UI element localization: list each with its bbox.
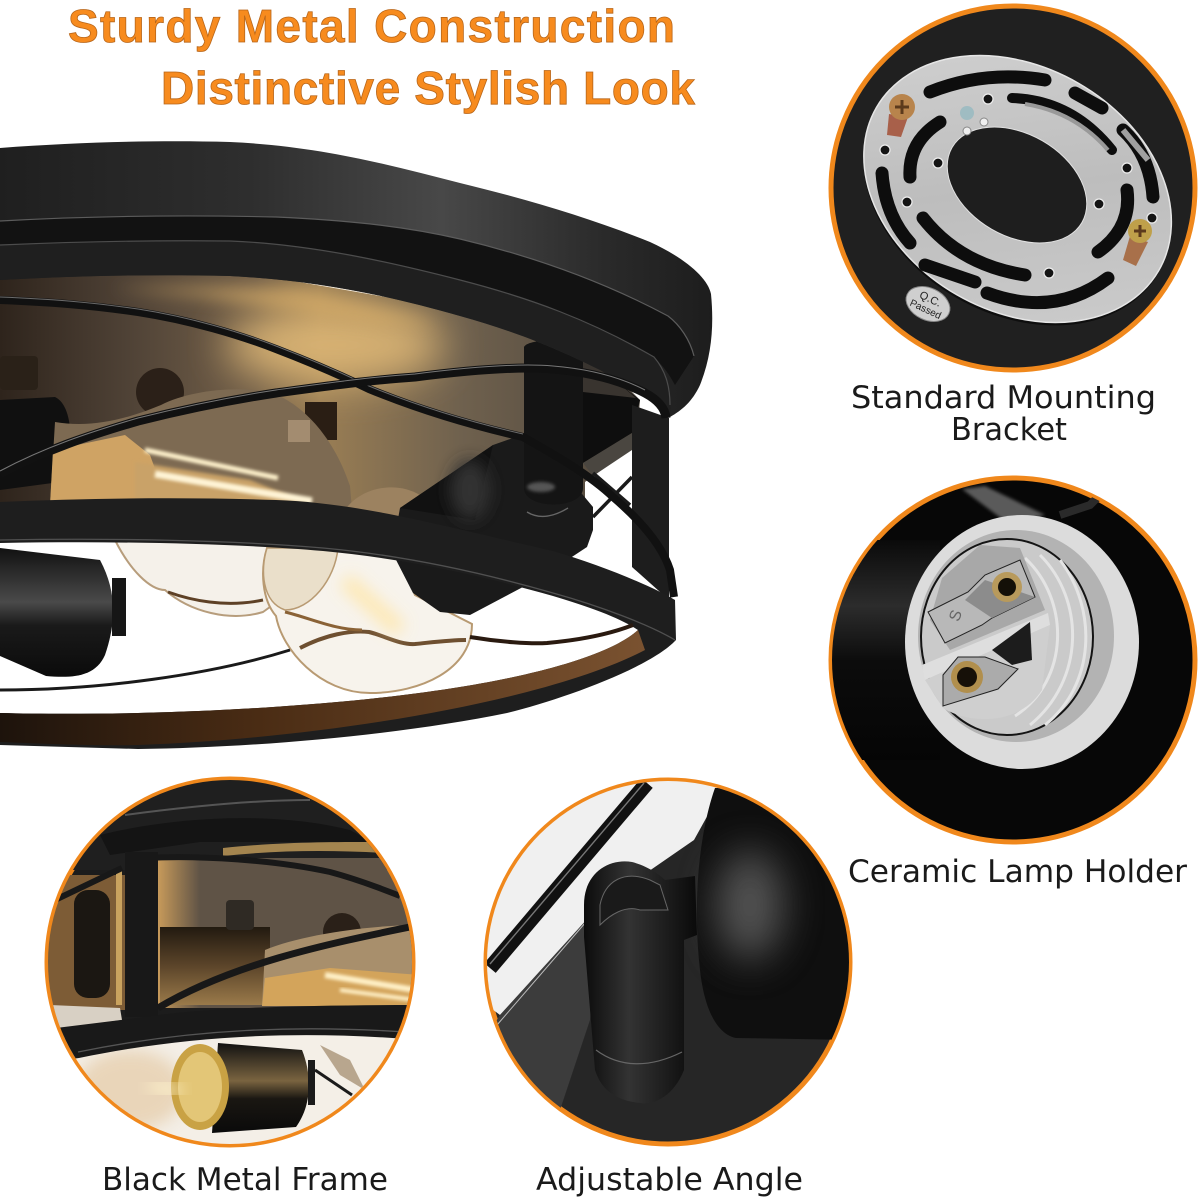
small socket with gold disc [212,1043,309,1133]
grey slope [496,922,590,1108]
large bulb, upper part [50,389,352,510]
right socket [392,432,593,615]
front bulb [263,548,472,693]
left part of interior [45,875,125,1010]
title: Sturdy Metal Construction [68,0,675,52]
cord [490,783,647,968]
holes [880,94,1157,278]
dark recess [992,622,1032,665]
screw right [1123,219,1152,266]
cross wires [593,473,632,517]
drum groove [0,216,694,385]
white ceramic rim [905,515,1139,769]
wires [145,857,400,896]
sticker [906,286,950,322]
label: standard mounting bracket: Standard Mounting [851,380,1156,416]
vertical post [125,852,158,1017]
lower bulb behind ring [115,540,335,616]
small bulb behind right socket [345,487,420,520]
black body sheen [830,540,940,760]
label: standard mounting bracket: Bracket [951,412,1067,448]
lower ring [0,498,676,749]
circle: adjustable angle [480,775,860,1144]
title: Distinctive Stylish Look [161,62,695,114]
black shade [697,788,860,1040]
knobs [226,900,254,930]
vertical frame bar [632,405,669,600]
sticker: Q.C. [917,289,943,310]
white background [480,775,730,1015]
upper contact plate: S [946,608,966,624]
circle: mounting bracket [815,2,1200,379]
upper left socket [0,397,70,490]
mounting knobs [0,356,337,440]
silver plate [863,54,1172,326]
vertical mount post [524,341,583,504]
sticker: Passed [908,298,943,322]
title [68,0,695,114]
main product image: ceiling light [0,141,712,749]
label: ceramic lamp holder: Ceramic Lamp Holder [848,854,1187,890]
label: standard mounting bracket [851,380,1156,448]
socket in background [160,927,270,1005]
circle: black metal frame [40,779,420,1150]
bulb inside [262,925,420,1006]
brown inner surface of ring [0,630,645,745]
screw top left [887,94,915,137]
interior [158,858,420,1008]
swivel post [584,861,697,1103]
circle: ceramic lamp holder [830,478,1195,842]
dish behind post [583,355,640,463]
ring band [60,1005,407,1058]
inner shell [930,545,1045,650]
upper contact plate [928,560,1035,643]
label: black metal frame: Black Metal Frame [102,1162,388,1198]
thread rings [1015,555,1086,725]
label: adjustable angle: Adjustable Angle [536,1162,803,1198]
upper drum [0,141,712,417]
ring highlight [0,539,675,640]
drum lower band [0,241,670,417]
slots [882,77,1153,303]
lower left socket [0,548,113,677]
lower contact plate [943,657,1018,706]
wires [0,297,674,690]
lamp interior [0,270,640,520]
lower white [64,1028,400,1144]
